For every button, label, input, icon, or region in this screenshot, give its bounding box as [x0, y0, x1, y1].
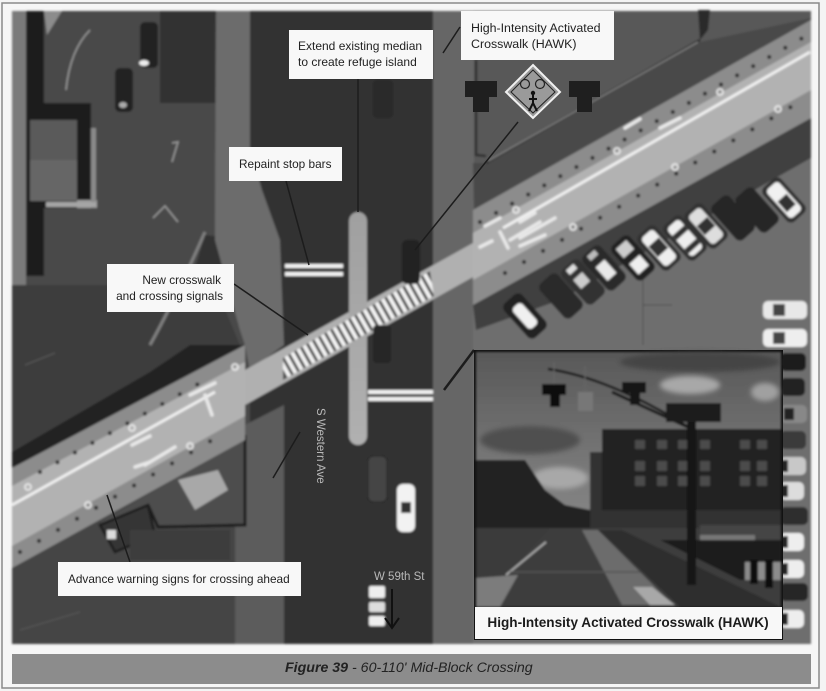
icon: bicycle and pedestrian warning sign	[506, 65, 560, 118]
callout: HAWK: High-Intensity Activated	[471, 21, 601, 35]
west sidewalk	[215, 11, 284, 370]
icon: HAWK signal heads and sign	[465, 65, 600, 118]
west lower grass streaks	[20, 353, 80, 630]
photo caption: High-Intensity Activated Crosswalk (HAWK)	[487, 615, 769, 630]
southeast-west land	[12, 405, 284, 644]
pavement markings	[132, 118, 680, 467]
angled parked cars	[501, 175, 808, 341]
bikeway outer bands	[12, 345, 245, 568]
bike lane centre lines	[12, 52, 810, 505]
lot marks	[66, 30, 178, 222]
crosswalk	[283, 271, 434, 380]
vehicles on avenue	[368, 80, 420, 626]
callout: new crosswalk: New crosswalk	[142, 273, 221, 287]
inner lighter bands	[12, 362, 245, 546]
southwest lawn	[12, 285, 240, 468]
trees	[476, 460, 590, 528]
median	[349, 212, 367, 445]
dark landscaped verge	[12, 345, 245, 468]
tree rows	[20, 36, 806, 552]
callout: advance warning	[58, 562, 301, 596]
west side parking lot and edge	[12, 11, 216, 311]
callout: HAWK	[461, 11, 614, 60]
column parked cars	[763, 301, 808, 628]
southeast parking	[473, 118, 811, 644]
caption bar: Figure 39 - 60-110' Mid-Block Crossing	[285, 660, 533, 676]
callout: repaint stop bars: Repaint stop bars	[239, 157, 332, 171]
east sidewalk	[433, 11, 474, 644]
signal heads	[542, 384, 566, 407]
callout: repaint stop bars	[229, 147, 342, 181]
crossing band	[245, 243, 473, 405]
fence and clutter	[700, 525, 781, 555]
caption bar	[12, 654, 811, 684]
ground	[476, 528, 781, 607]
callout: new crosswalk	[107, 264, 234, 312]
icon: signal head left	[465, 81, 497, 112]
bike symbols	[25, 89, 781, 508]
car: west lot	[115, 22, 158, 112]
building	[602, 429, 781, 534]
main avenue	[250, 11, 433, 644]
callout: extend median: Extend existing median	[298, 39, 422, 53]
photo scene	[476, 352, 781, 607]
northeast lot	[474, 11, 811, 210]
callout: extend median	[289, 30, 433, 79]
street label: W 59th St: W 59th St	[374, 571, 425, 583]
callout: HAWK: Crosswalk (HAWK)	[471, 37, 577, 51]
signal pole	[687, 420, 696, 585]
leader lines	[107, 27, 518, 562]
callout: extend median: to create refuge island	[298, 55, 417, 69]
panel: HAWK photo	[474, 350, 783, 640]
stop bars	[285, 264, 433, 401]
arrow: south direction	[385, 589, 399, 628]
callout: advance warning: Advance warning signs for crossing ahead	[68, 572, 290, 586]
callout: new crosswalk: and crossing signals	[116, 289, 223, 303]
icon: signal head right	[569, 81, 600, 112]
street label: S Western Ave: S Western Ave	[314, 408, 326, 484]
photo caption	[475, 607, 782, 639]
